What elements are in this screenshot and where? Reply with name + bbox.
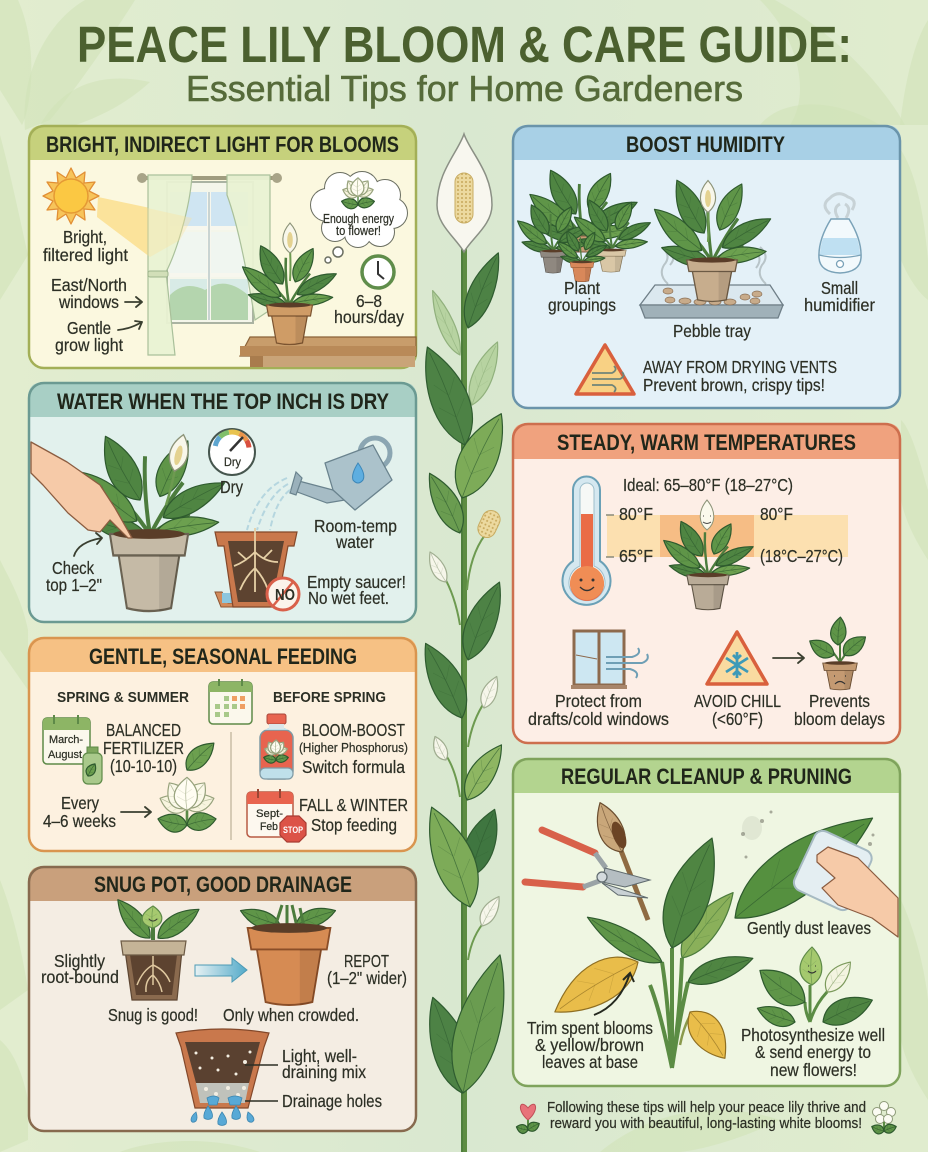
arrow: chill to delays xyxy=(773,653,804,663)
icon: drying-vent warning xyxy=(576,345,634,394)
feeding labels: BALANCED xyxy=(106,720,181,740)
feeding labels: Switch formula xyxy=(302,757,405,777)
pot labels: Drainage holes xyxy=(282,1091,382,1111)
cleanup labels: Trim spent blooms xyxy=(527,1018,653,1038)
light labels: hours/day xyxy=(334,307,404,327)
feeding labels: SPRING & SUMMER xyxy=(57,689,189,706)
panel: watering xyxy=(28,382,417,623)
watering labels: Room-temp xyxy=(314,516,397,536)
pot labels: Light, well- xyxy=(282,1046,357,1066)
pebble tray xyxy=(640,285,783,318)
watering labels: Dry xyxy=(220,477,243,497)
thought cloud: to flower! xyxy=(336,224,381,238)
spent bloom on stem xyxy=(588,798,648,920)
pot labels: draining mix xyxy=(282,1062,366,1082)
divider xyxy=(230,732,232,840)
steam waves xyxy=(662,247,766,284)
heading: SNUG POT, GOOD DRAINAGE xyxy=(94,872,352,897)
feeding labels: FERTILIZER xyxy=(103,738,184,758)
icon: spring calendar and bottle: August xyxy=(48,749,82,761)
watering labels: Empty saucer! xyxy=(307,572,406,592)
temperature labels: 80°F xyxy=(619,504,653,524)
icon: spring calendar and bottle: March- xyxy=(49,734,83,746)
icon: spring calendar and bottle xyxy=(43,715,102,784)
small happy plant xyxy=(751,947,877,1032)
cleanup labels xyxy=(527,918,885,1080)
feeding labels: FALL & WINTER xyxy=(299,795,408,815)
icon: sad plant xyxy=(806,616,870,690)
humidity labels xyxy=(548,278,875,395)
cleanup labels: & yellow/brown xyxy=(535,1035,644,1055)
feeding labels: Every xyxy=(61,793,99,813)
cleanup labels: leaves at base xyxy=(542,1052,638,1072)
temperature labels: Ideal: 65–80°F (18–27°C) xyxy=(623,475,793,495)
light labels: 6–8 xyxy=(356,291,382,311)
water streams xyxy=(247,478,290,530)
ideal range bands xyxy=(607,515,848,557)
central peace lily stem xyxy=(412,134,519,1152)
panel: humidity xyxy=(512,125,901,409)
icon: centre calendar xyxy=(209,679,252,724)
pot labels: Snug is good! xyxy=(108,1005,198,1025)
pot labels xyxy=(41,951,407,1111)
light beam xyxy=(97,197,150,257)
yellow leaf to trim xyxy=(544,943,647,1027)
lily on tray xyxy=(648,175,774,301)
icon: chill warning xyxy=(707,632,767,684)
panel: bright indirect light xyxy=(28,125,417,369)
icon: sun xyxy=(43,168,99,224)
side buds xyxy=(424,508,504,960)
humidity labels: AWAY FROM DRYING VENTS xyxy=(643,357,837,377)
pot labels: Slightly xyxy=(54,951,105,971)
pot labels: REPOT xyxy=(344,951,389,971)
feeding labels: (Higher Phosphorus) xyxy=(299,740,408,755)
thought cloud: Enough energy xyxy=(323,212,395,226)
icon: humidifier xyxy=(819,194,861,273)
cleanup labels: & send energy to xyxy=(755,1042,871,1062)
icon: clock xyxy=(362,256,394,288)
heading: GENTLE, SEASONAL FEEDING xyxy=(89,644,357,669)
temperature labels: (<60°F) xyxy=(712,709,763,729)
smiling lily xyxy=(658,500,756,610)
icon: winter calendar and stop sign xyxy=(247,789,306,842)
feeding labels: BLOOM-BOOST xyxy=(302,720,405,740)
potted plant being checked xyxy=(68,429,229,611)
icon: drafty window xyxy=(571,631,648,689)
temperature labels: Prevents xyxy=(809,691,870,711)
heading: BOOST HUMIDITY xyxy=(626,132,785,157)
icon: green leaf xyxy=(180,736,220,776)
root-bound pot xyxy=(110,894,204,1000)
main spathe flower xyxy=(437,134,492,252)
icon: winter calendar and stop sign: Sept- xyxy=(256,808,283,820)
humidity labels: Plant xyxy=(564,278,600,298)
light labels: windows xyxy=(58,292,119,312)
light labels: grow light xyxy=(55,335,123,355)
icon: winter calendar and stop sign: STOP xyxy=(283,825,303,835)
temperature labels: 65°F xyxy=(619,546,653,566)
larger terracotta pot xyxy=(237,902,338,1005)
icon: white flower xyxy=(870,1102,898,1136)
temperature labels: drafts/cold windows xyxy=(528,709,669,729)
light labels: East/North xyxy=(51,275,127,295)
heading: REGULAR CLEANUP & PRUNING xyxy=(561,764,852,789)
watering labels xyxy=(46,477,406,608)
feeding labels: 4–6 weeks xyxy=(43,811,116,831)
watering labels: Check xyxy=(52,558,94,578)
watering labels: No wet feet. xyxy=(308,588,389,608)
icon: winter calendar and stop sign: Feb xyxy=(260,821,278,833)
panel: cleanup and pruning xyxy=(512,758,901,1087)
light labels xyxy=(43,227,404,355)
drainage cross-section xyxy=(176,1029,269,1126)
light labels: Gentle xyxy=(67,318,111,338)
panel: pot and drainage xyxy=(28,866,417,1132)
table xyxy=(240,337,416,367)
watering labels: top 1–2" xyxy=(46,575,102,595)
icon: watering can xyxy=(290,438,392,510)
icon: no sign: NO xyxy=(275,587,295,604)
cutaway pot with roots xyxy=(215,528,297,607)
cleanup labels: new flowers! xyxy=(770,1060,857,1080)
watering labels: water xyxy=(335,532,374,552)
hand testing soil xyxy=(31,442,132,538)
arrow: repot xyxy=(195,958,247,982)
icon: thermometer xyxy=(562,476,614,605)
feeding labels: BEFORE SPRING xyxy=(273,689,386,706)
temperature labels: 80°F xyxy=(760,504,793,524)
temperature labels: Protect from xyxy=(555,691,642,711)
icon: pruners xyxy=(525,830,650,898)
humidity labels: Prevent brown, crispy tips! xyxy=(643,375,825,395)
feeding labels: Stop feeding xyxy=(311,815,397,835)
dusting leaf, cloth and hand xyxy=(719,796,898,937)
humidity labels: Pebble tray xyxy=(673,321,751,341)
plant grouping xyxy=(513,166,653,282)
icon: no sign xyxy=(267,578,299,610)
panel: feeding xyxy=(28,637,417,852)
pot labels: root-bound xyxy=(41,967,119,987)
icon: moisture gauge: Dry xyxy=(224,455,241,469)
light labels: filtered light xyxy=(43,245,128,265)
icon: moisture gauge xyxy=(209,429,255,475)
temperature labels: bloom delays xyxy=(794,709,885,729)
cleanup labels: Gently dust leaves xyxy=(747,918,871,938)
humidity labels: Small xyxy=(821,278,858,298)
heading: BRIGHT, INDIRECT LIGHT FOR BLOOMS xyxy=(46,132,399,157)
humidity labels: groupings xyxy=(548,295,616,315)
icon: lily flower xyxy=(156,777,218,835)
feeding labels: (10-10-10) xyxy=(110,756,177,776)
feeding labels xyxy=(43,689,408,835)
pot labels: Only when crowded. xyxy=(223,1005,359,1025)
temperature labels xyxy=(528,475,885,729)
icon: heart flower xyxy=(515,1104,541,1135)
arrow: trim xyxy=(594,973,634,1015)
stem leaves xyxy=(412,248,519,1098)
heading: WATER WHEN THE TOP INCH IS DRY xyxy=(57,389,389,414)
panel: temperature xyxy=(512,423,901,744)
temperature labels: AVOID CHILL xyxy=(694,691,781,711)
humidity labels: humidifier xyxy=(804,295,875,315)
footer message: Following these tips will help your peace lily thrive and xyxy=(547,1099,866,1116)
heading: STEADY, WARM TEMPERATURES xyxy=(557,430,856,455)
footer message: reward you with beautiful, long-lasting white blooms! xyxy=(550,1115,862,1132)
temperature labels: (18°C–27°C) xyxy=(760,546,843,566)
potted peace lily xyxy=(237,223,339,344)
icon: bloom boost bottle xyxy=(260,714,293,779)
window with curtains xyxy=(97,173,282,355)
pot labels: (1–2" wider) xyxy=(327,968,407,988)
subtitle: Essential Tips for Home Gardeners xyxy=(186,68,743,109)
thought cloud xyxy=(311,172,407,263)
central plant xyxy=(581,830,756,1068)
footer message xyxy=(515,1099,898,1136)
cleanup labels: Photosynthesize well xyxy=(741,1025,885,1045)
light labels: Bright, xyxy=(63,227,107,247)
